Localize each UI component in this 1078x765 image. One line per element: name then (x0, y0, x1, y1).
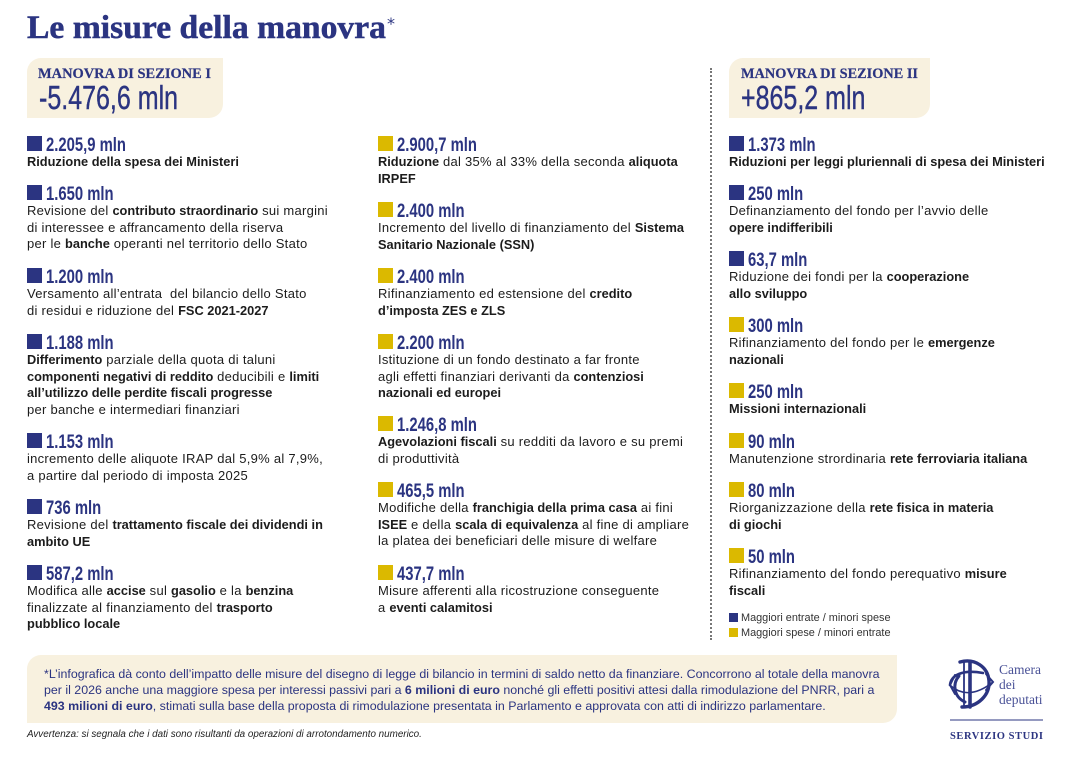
measure: 250 mln missioni (729, 380, 866, 416)
measure: 437,7 mln: 437,7 mln (397, 562, 465, 584)
measure: 80 mln: 80 mln (748, 480, 795, 502)
measure: 1.188 mln: componenti negativi di reddito deducibili e limiti (27, 369, 319, 384)
measure: 2.400 mln ZES: d’imposta ZES e ZLS (378, 303, 505, 318)
panel: Sezione II total: +865,2 mln (741, 79, 865, 116)
measure: 736 mln (27, 496, 323, 549)
measure: 1.188 mln: all’utilizzo delle perdite fiscali progresse (27, 385, 272, 400)
measure: 2.200 mln: Istituzione di un fondo destinato a far fronte (378, 352, 640, 367)
measure: 50 mln: fiscali (729, 583, 765, 598)
title: Le misure della manovra (27, 10, 386, 46)
measure: 2.400 mln SSN: Incremento del livello di finanziamento del Sistema (378, 220, 684, 235)
measure column: Sezione I maggiori spese (378, 134, 689, 615)
panel: Sezione II total (729, 58, 930, 118)
footnote panel: per il 2026 anche una maggiore spesa per interessi passivi pari a 6 milioni di euro nonché gli effetti positivi attesi dalla rimodulazione del PNRR, pari a (44, 683, 874, 697)
measure: 1.200 mln: Versamento all’entrata del bilancio dello Stato (27, 286, 307, 301)
measure: 2.400 mln SSN: 2.400 mln (397, 200, 465, 222)
footnote panel: 493 milioni di euro, stimati sulla base della proposta di rimodulazione presentata in Parlamento e approvata con atti di indirizzo parlamentare. (44, 699, 826, 713)
measure: 1.650 mln (27, 182, 328, 251)
footnote panel: *L’infografica dà conto dell’impatto delle misure del disegno di legge di bilancio in termini di saldo netto da finanziare. Concorrono al totale della manovra (44, 667, 880, 681)
footnote panel (27, 655, 897, 723)
legend: Maggiori entrate / minori spese (741, 612, 891, 624)
measure: 90 mln: Manutenzione strordinaria rete ferroviaria italiana (729, 451, 1027, 466)
measure: 2.200 mln: nazionali ed europei (378, 385, 501, 400)
measure: 63,7 mln: allo sviluppo (729, 286, 807, 301)
measure: 2.200 mln (378, 332, 644, 400)
measure: 2.400 mln ZES: 2.400 mln (397, 266, 465, 288)
measure: 1.200 mln: di residui e riduzione del FSC 2021-2027 (27, 303, 268, 318)
measure: 2.200 mln: agli effetti finanziari derivanti da contenziosi (378, 369, 644, 384)
measure: 1.246,8 mln: di produttività (378, 451, 459, 466)
measure: 2.205,9 mln: Riduzione della spesa dei Ministeri (27, 154, 239, 169)
measure: 1.200 mln (27, 266, 307, 318)
measure: 2.200 mln: 2.200 mln (397, 332, 465, 354)
measure: 465,5 mln: la platea dei beneficiari delle misure di welfare (378, 533, 657, 548)
measure: 437,7 mln (378, 562, 659, 615)
logo wordmark: deputati (999, 692, 1043, 707)
logo wordmark: Camera (999, 662, 1041, 677)
warning note: Avvertenza: si segnala che i dati sono risultanti da operazioni di arrotondamento numerico. (27, 729, 422, 740)
measure: 587,2 mln: 587,2 mln (46, 562, 114, 584)
measure: 50 mln: Rifinanziamento del fondo perequativo misure (729, 566, 1007, 581)
measure: 300 mln: nazionali (729, 352, 784, 367)
measure: 80 mln (729, 480, 994, 532)
measure: 50 mln: 50 mln (748, 546, 795, 568)
measure: 1.246,8 mln (378, 414, 683, 466)
title: * (387, 14, 395, 33)
legend: Maggiori spese / minori entrate (741, 627, 891, 639)
measure: 250 mln missioni: Missioni internazionali (729, 401, 866, 416)
legend (729, 612, 891, 639)
measure: 2.400 mln SSN (378, 200, 684, 252)
measure: 2.900,7 mln (378, 134, 678, 186)
measure: 2.400 mln ZES (378, 266, 632, 318)
measure column: Sezione II (729, 134, 1045, 598)
logo subtitle: SERVIZIO STUDI (950, 731, 1043, 742)
measure: 736 mln: Revisione del trattamento fiscale dei dividendi in (27, 517, 323, 532)
measure: 1.188 mln: per banche e intermediari finanziari (27, 402, 240, 417)
measure: 1.246,8 mln: Agevolazioni fiscali su redditi da lavoro e su premi (378, 434, 683, 449)
measure column: Sezione I minori entrate e spese (27, 134, 328, 631)
measure: 465,5 mln: ISEE e della scala di equivalenza al fine di ampliare (378, 517, 689, 532)
panel: Sezione I total (27, 58, 223, 118)
panel: Sezione I total: -5.476,6 mln (39, 79, 178, 116)
measure: 50 mln (729, 546, 1007, 598)
measure: 736 mln: 736 mln (46, 496, 101, 518)
measure: 465,5 mln (378, 480, 689, 548)
measure: 90 mln (729, 430, 1028, 466)
measure: 250 mln opere: Definanziamento del fondo per l’avvio delle (729, 203, 988, 218)
measure: 465,5 mln: 465,5 mln (397, 480, 465, 502)
measure: 736 mln: ambito UE (27, 534, 90, 549)
measure: 1.153 mln: incremento delle aliquote IRAP dal 5,9% al 7,9%, (27, 451, 323, 466)
measure: 1.200 mln: 1.200 mln (46, 266, 114, 288)
measure: 2.900,7 mln: Riduzione dal 35% al 33% della seconda aliquota (378, 154, 678, 169)
measure: 437,7 mln: Misure afferenti alla ricostruzione conseguente (378, 583, 659, 598)
measure: 90 mln: 90 mln (748, 430, 795, 452)
measure: 2.900,7 mln: IRPEF (378, 171, 416, 186)
measure: 250 mln opere: opere indifferibili (729, 220, 833, 235)
measure: 1.153 mln: a partire dal periodo di imposta 2025 (27, 468, 248, 483)
measure: 250 mln opere (729, 182, 988, 235)
measure: 63,7 mln: Riduzione dei fondi per la cooperazione (729, 269, 969, 284)
measure: 587,2 mln: Modifica alle accise sul gasolio e la benzina (27, 583, 293, 598)
measure: 2.205,9 mln: 2.205,9 mln (46, 134, 126, 156)
measure: 1.650 mln: di interessee e affrancamento della riserva (27, 220, 283, 235)
icon: monogram (950, 661, 993, 707)
measure: 437,7 mln: a eventi calamitosi (378, 600, 493, 615)
measure: 465,5 mln: Modifiche della franchigia della prima casa ai fini (378, 500, 673, 515)
measure: 1.153 mln (27, 430, 323, 483)
measure: 63,7 mln: 63,7 mln (748, 248, 807, 270)
logo wordmark: dei (999, 677, 1016, 692)
measure: 2.400 mln ZES: Rifinanziamento ed estensione del credito (378, 286, 632, 301)
measure: 1.650 mln: per le banche operanti nel territorio dello Stato (27, 236, 307, 251)
measure: 587,2 mln (27, 562, 294, 631)
measure: 1.153 mln: 1.153 mln (46, 430, 114, 452)
measure: 2.400 mln SSN: Sanitario Nazionale (SSN) (378, 237, 534, 252)
panel: Sezione I total: MANOVRA DI SEZIONE I (38, 66, 211, 82)
measure: 2.900,7 mln: 2.900,7 mln (397, 134, 477, 156)
measure: 1.188 mln (27, 332, 319, 417)
measure: 300 mln: 300 mln (748, 314, 803, 336)
measure: 1.246,8 mln: 1.246,8 mln (397, 414, 477, 436)
panel: Sezione II total: MANOVRA DI SEZIONE II (741, 66, 918, 82)
measure: 587,2 mln: pubblico locale (27, 616, 120, 631)
measure: 1.188 mln: 1.188 mln (46, 332, 114, 354)
measure: 300 mln (729, 314, 995, 367)
logo: Camera dei deputati (948, 659, 1043, 742)
measure: 300 mln: Rifinanziamento del fondo per le emergenze (729, 335, 995, 350)
measure: 1.373 mln: Riduzioni per leggi pluriennali di spesa dei Ministeri (729, 154, 1045, 169)
measure: 1.373 mln (729, 134, 1045, 169)
measure: 1.188 mln: Differimento parziale della quota di taluni (27, 352, 276, 367)
measure: 1.650 mln: Revisione del contributo straordinario sui margini (27, 203, 328, 218)
measure: 1.373 mln: 1.373 mln (748, 134, 816, 156)
measure: 2.205,9 mln (27, 134, 239, 169)
measure: 587,2 mln: finalizzate al finanziamento del trasporto (27, 600, 273, 615)
measure: 80 mln: di giochi (729, 517, 782, 532)
measure: 80 mln: Riorganizzazione della rete fisica in materia (729, 500, 993, 515)
logo wordmark (999, 662, 1043, 707)
measure: 63,7 mln (729, 248, 969, 301)
measure: 1.650 mln: 1.650 mln (46, 182, 114, 204)
measure: 250 mln missioni: 250 mln (748, 380, 803, 402)
measure: 250 mln opere: 250 mln (748, 182, 803, 204)
